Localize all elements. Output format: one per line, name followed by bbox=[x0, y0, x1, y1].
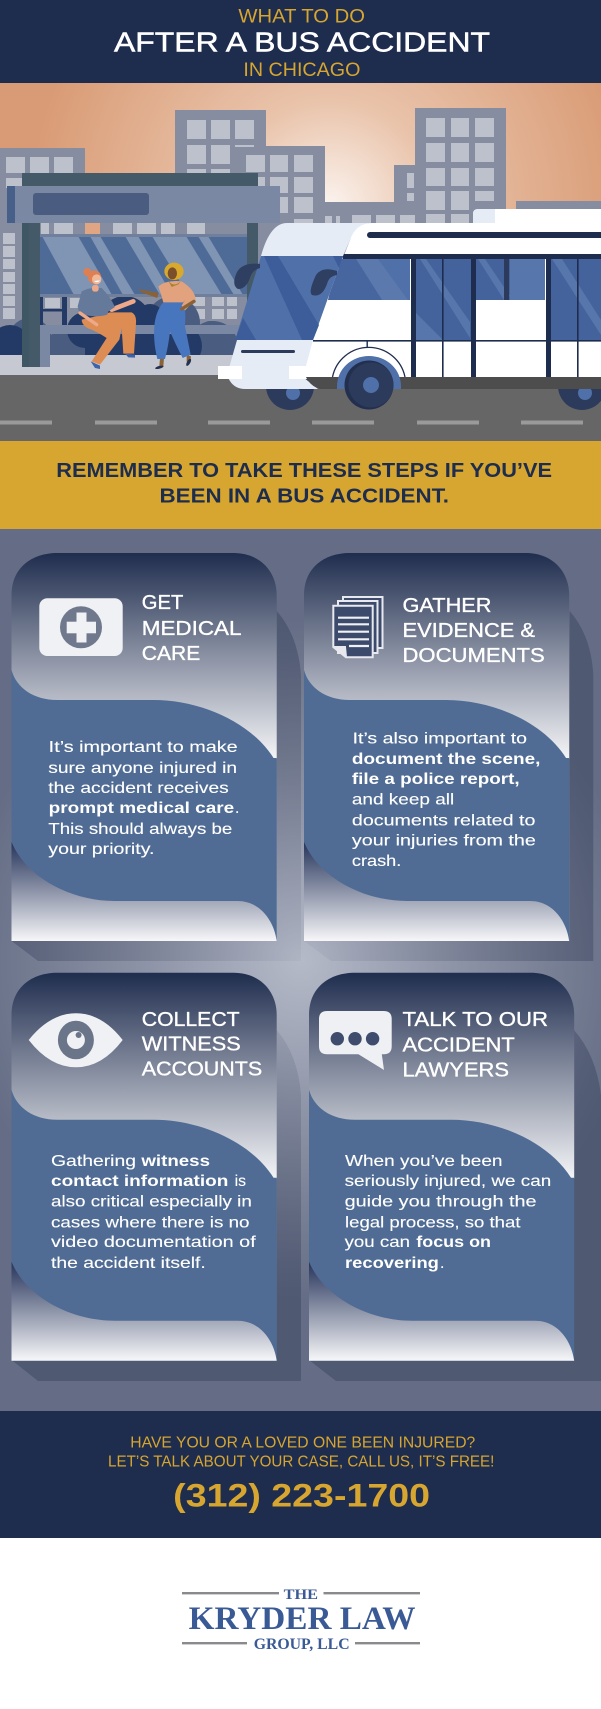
card shape bbox=[304, 553, 569, 941]
heading: TALK TO OUR bbox=[402, 1008, 548, 1031]
logo: the kryder law group: THE bbox=[284, 1587, 318, 1603]
illustration: bus stop scene bbox=[0, 83, 601, 441]
bus cab and windshield bbox=[218, 223, 372, 389]
call to action band bbox=[0, 1411, 601, 1538]
main title: AFTER A BUS ACCIDENT bbox=[114, 27, 490, 58]
bus windows bbox=[313, 254, 601, 377]
front wheel bbox=[332, 341, 405, 410]
heading bbox=[142, 591, 242, 665]
heading: GATHER bbox=[402, 594, 492, 617]
body text bbox=[51, 1153, 256, 1272]
icon: medical kit bbox=[39, 598, 123, 656]
panel: talk to our accident lawyers bbox=[309, 973, 601, 1381]
icon: speech bubble bbox=[319, 1011, 392, 1070]
body text: contact information bbox=[51, 1173, 228, 1190]
banner text: REMEMBER TO TAKE THESE STEPS IF YOU’VE bbox=[56, 459, 552, 482]
body text: the accident receives bbox=[48, 780, 229, 797]
title line: what to do: WHAT TO DO bbox=[238, 7, 365, 28]
body text: . bbox=[235, 800, 239, 817]
person: standing woman bbox=[138, 263, 196, 370]
shelter sign bbox=[7, 186, 280, 223]
body text: It’s also important to bbox=[353, 730, 527, 747]
body text: documents related to bbox=[352, 812, 536, 829]
body text: prompt medical care bbox=[49, 800, 234, 817]
heading bbox=[402, 1008, 548, 1082]
body text bbox=[48, 739, 239, 858]
heading: DOCUMENTS bbox=[402, 644, 545, 667]
call to action text bbox=[108, 1434, 494, 1470]
heading: ACCOUNTS bbox=[142, 1057, 262, 1080]
city buildings bbox=[0, 108, 601, 358]
body text: . bbox=[440, 1255, 444, 1272]
shelter glass bbox=[40, 236, 247, 295]
body text: also critical especially in bbox=[51, 1194, 252, 1211]
heading: WITNESS bbox=[142, 1033, 241, 1056]
call to action text: LET’S TALK ABOUT YOUR CASE, CALL US, IT’S FREE! bbox=[108, 1453, 494, 1470]
banner text bbox=[56, 459, 552, 508]
body text: you can bbox=[345, 1234, 410, 1251]
title line: in chicago: IN CHICAGO bbox=[243, 60, 360, 81]
heading: CARE bbox=[142, 642, 200, 665]
bus body bbox=[296, 223, 601, 378]
body text: seriously injured, we can bbox=[345, 1173, 551, 1190]
body text: This should always be bbox=[48, 821, 232, 838]
body text: file a police report, bbox=[352, 771, 520, 788]
body text: cases where there is no bbox=[51, 1214, 250, 1231]
body text bbox=[352, 730, 540, 870]
body text: the accident itself. bbox=[51, 1255, 206, 1272]
logo: the kryder law group bbox=[182, 1587, 420, 1653]
call to action text: HAVE YOU OR A LOVED ONE BEEN INJURED? bbox=[130, 1434, 475, 1451]
body text: focus on bbox=[416, 1234, 491, 1251]
body text: recovering bbox=[345, 1255, 439, 1272]
heading: MEDICAL bbox=[142, 617, 242, 640]
body text: guide you through the bbox=[345, 1194, 537, 1211]
body text: crash. bbox=[352, 853, 401, 870]
body text: When you’ve been bbox=[345, 1153, 502, 1170]
road bbox=[0, 375, 601, 441]
person: seated woman bbox=[78, 268, 136, 369]
heading: ACCIDENT bbox=[402, 1034, 515, 1057]
sidewalk bbox=[0, 355, 233, 375]
logo: the kryder law group: KRYDER LAW bbox=[189, 1601, 416, 1637]
banner text: BEEN IN A BUS ACCIDENT. bbox=[160, 485, 449, 508]
body text: It’s important to make bbox=[49, 739, 238, 756]
body text: Gathering bbox=[51, 1153, 136, 1170]
bus shelter bbox=[7, 173, 280, 367]
body text: your injuries from the bbox=[352, 832, 536, 849]
logo: the kryder law group: GROUP, LLC bbox=[254, 1636, 350, 1653]
phone number: (312) 223-1700 bbox=[173, 1478, 430, 1514]
heading: LAWYERS bbox=[402, 1059, 509, 1082]
heading bbox=[402, 594, 545, 667]
icon: eye bbox=[29, 1013, 123, 1067]
body text: legal process, so that bbox=[345, 1214, 521, 1231]
panel: gather evidence and documents bbox=[304, 553, 593, 961]
card shape bbox=[12, 553, 277, 941]
panel: get medical care bbox=[12, 553, 301, 961]
bus bbox=[218, 209, 601, 410]
header band bbox=[0, 0, 601, 83]
body text: your priority. bbox=[48, 841, 154, 858]
body text: and keep all bbox=[352, 792, 454, 809]
body text: video documentation of bbox=[51, 1234, 256, 1251]
card shape bbox=[12, 973, 277, 1361]
icon: documents bbox=[333, 597, 382, 657]
gold banner bbox=[0, 441, 601, 529]
bus skirt bbox=[306, 377, 601, 389]
body text: is bbox=[235, 1173, 246, 1190]
body text: witness bbox=[140, 1153, 210, 1170]
heading bbox=[142, 1008, 262, 1080]
heading: EVIDENCE & bbox=[402, 619, 535, 642]
body text: sure anyone injured in bbox=[48, 760, 237, 777]
panel: collect witness accounts bbox=[12, 973, 301, 1381]
rear and far wheels bbox=[266, 379, 601, 410]
body text: document the scene, bbox=[352, 751, 540, 768]
heading: GET bbox=[142, 591, 184, 614]
steps background bbox=[0, 529, 601, 1411]
mirrors bbox=[234, 264, 337, 296]
bus roof unit bbox=[473, 209, 601, 223]
bushes bbox=[0, 297, 237, 355]
card shape bbox=[309, 973, 574, 1361]
heading: COLLECT bbox=[142, 1008, 240, 1031]
body text bbox=[345, 1153, 551, 1272]
